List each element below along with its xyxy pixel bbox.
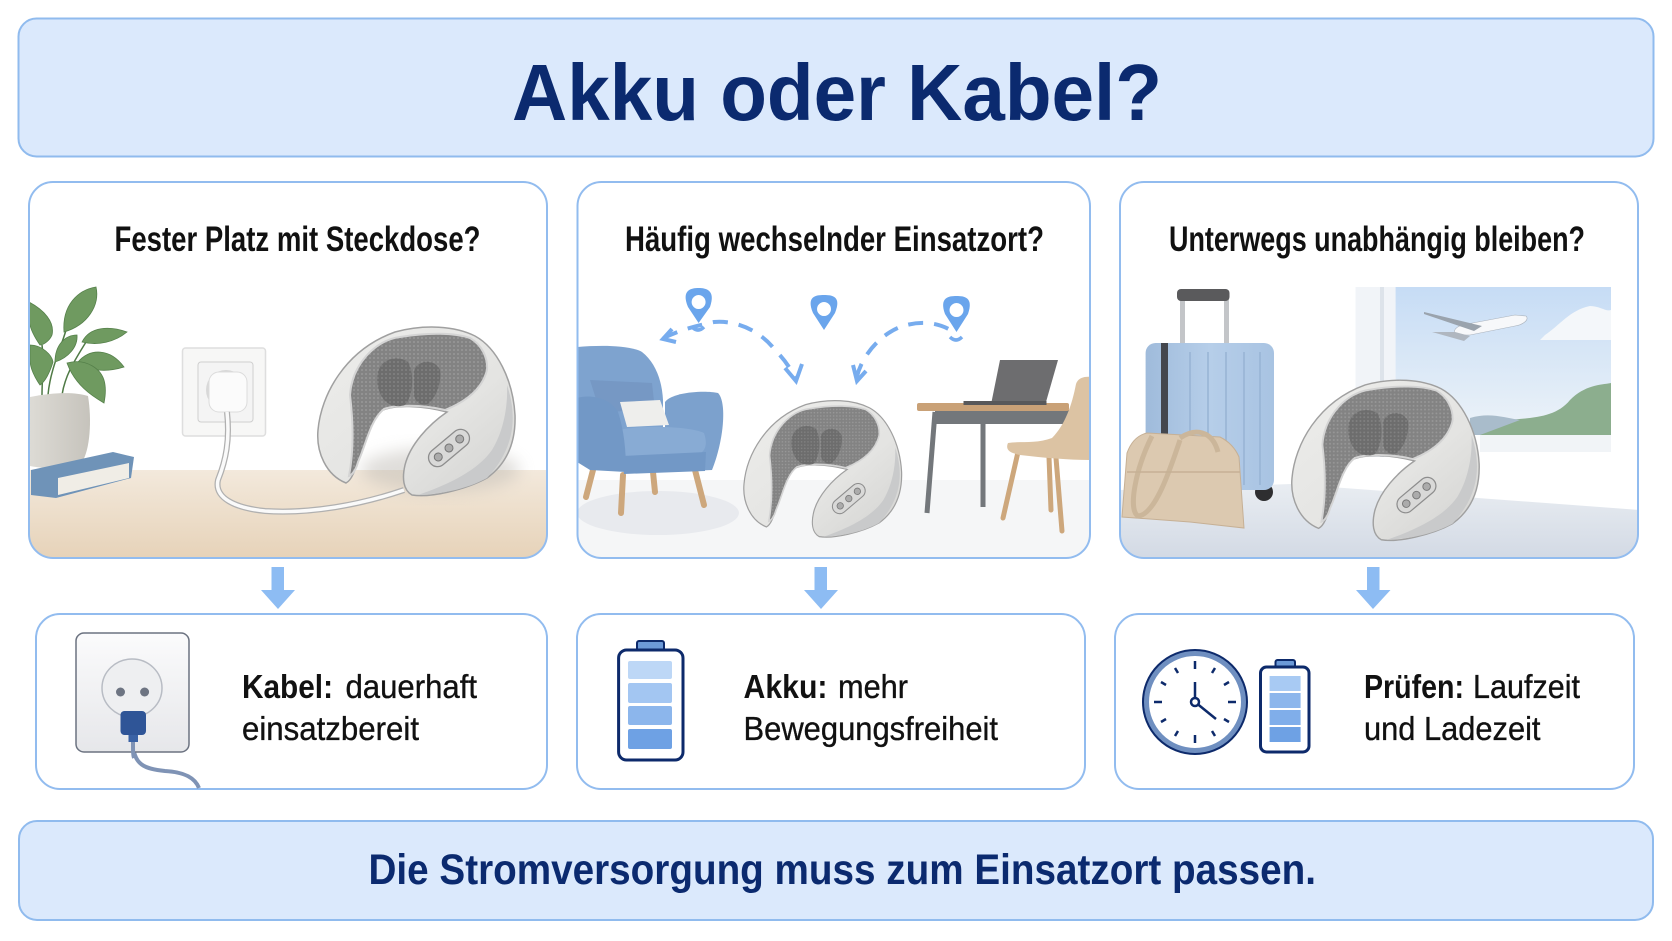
icon: uhr xyxy=(1143,650,1247,754)
rug xyxy=(577,491,739,535)
text: kabel: Kabel: xyxy=(242,668,333,705)
text: prüfen: Prüfen: xyxy=(1364,668,1464,705)
text: prüfen xyxy=(1364,668,1580,747)
panel: unterwegs xyxy=(1120,182,1640,560)
travel bag xyxy=(1122,432,1244,528)
footer text: Die Stromversorgung muss zum Einsatzort passen. xyxy=(368,846,1316,894)
text: akku: Bewegungsfreiheit xyxy=(744,710,998,747)
scene: steckdose xyxy=(29,287,547,560)
beige chair xyxy=(1003,377,1092,531)
text: kabel: dauerhaft xyxy=(346,668,477,705)
text: prüfen: und Ladezeit xyxy=(1364,710,1540,747)
card: kabel xyxy=(36,614,547,789)
arrow 3 xyxy=(1356,567,1390,609)
neck massager xyxy=(318,327,515,496)
text: kabel: einsatzbereit xyxy=(242,710,419,747)
heading: fester Platz: Fester Platz mit Steckdose? xyxy=(114,220,480,259)
neck massager xyxy=(1292,380,1479,540)
books xyxy=(31,452,134,498)
icon: kleine batterie xyxy=(1260,660,1309,752)
cable xyxy=(218,412,404,512)
text: akku xyxy=(744,668,998,747)
footer banner xyxy=(19,821,1653,920)
location pins and dashed routes xyxy=(663,288,970,381)
title: Akku oder Kabel? xyxy=(512,48,1162,137)
suitcase xyxy=(1146,289,1274,501)
panel: wechselnder Einsatzort xyxy=(577,182,1092,560)
heading: einsatzort: Häufig wechselnder Einsatzort? xyxy=(625,220,1044,259)
arrow 1 xyxy=(261,567,295,609)
card: akku xyxy=(577,614,1085,789)
panel: fester Platz xyxy=(29,182,547,560)
scene: wechselnde Orte xyxy=(577,288,1092,560)
arrow 2 xyxy=(804,567,838,609)
neck massager xyxy=(744,401,902,537)
window with airplane xyxy=(1356,287,1611,457)
shadow xyxy=(360,448,520,492)
text: kabel xyxy=(242,668,477,747)
armchair xyxy=(577,346,723,513)
scene: reise xyxy=(1120,287,1640,560)
wall socket with plug xyxy=(182,348,266,436)
desk with laptop xyxy=(917,360,1070,513)
card: prüfen xyxy=(1115,614,1634,789)
icon: batterie xyxy=(619,641,683,760)
icon: steckdose xyxy=(76,633,199,788)
text: prüfen: Laufzeit xyxy=(1473,668,1580,705)
text: akku: mehr xyxy=(838,668,908,705)
title banner xyxy=(18,18,1654,156)
text: akku: Akku: xyxy=(744,668,828,705)
plant xyxy=(29,287,127,468)
